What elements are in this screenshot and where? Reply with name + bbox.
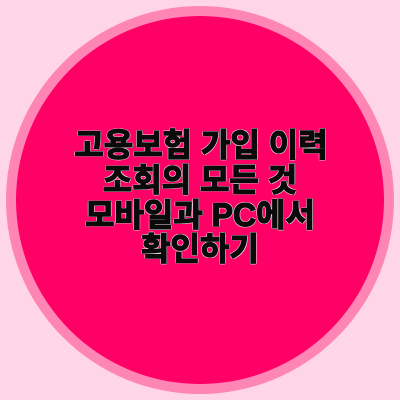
title line 4: 확인하기: [141, 231, 259, 267]
title: [74, 127, 328, 267]
title line 3: 모바일과 PC에서: [85, 197, 315, 233]
title line 1: 고용보험 가입 이력: [74, 127, 328, 163]
title line 2: 조회의 모든 것: [103, 162, 297, 198]
